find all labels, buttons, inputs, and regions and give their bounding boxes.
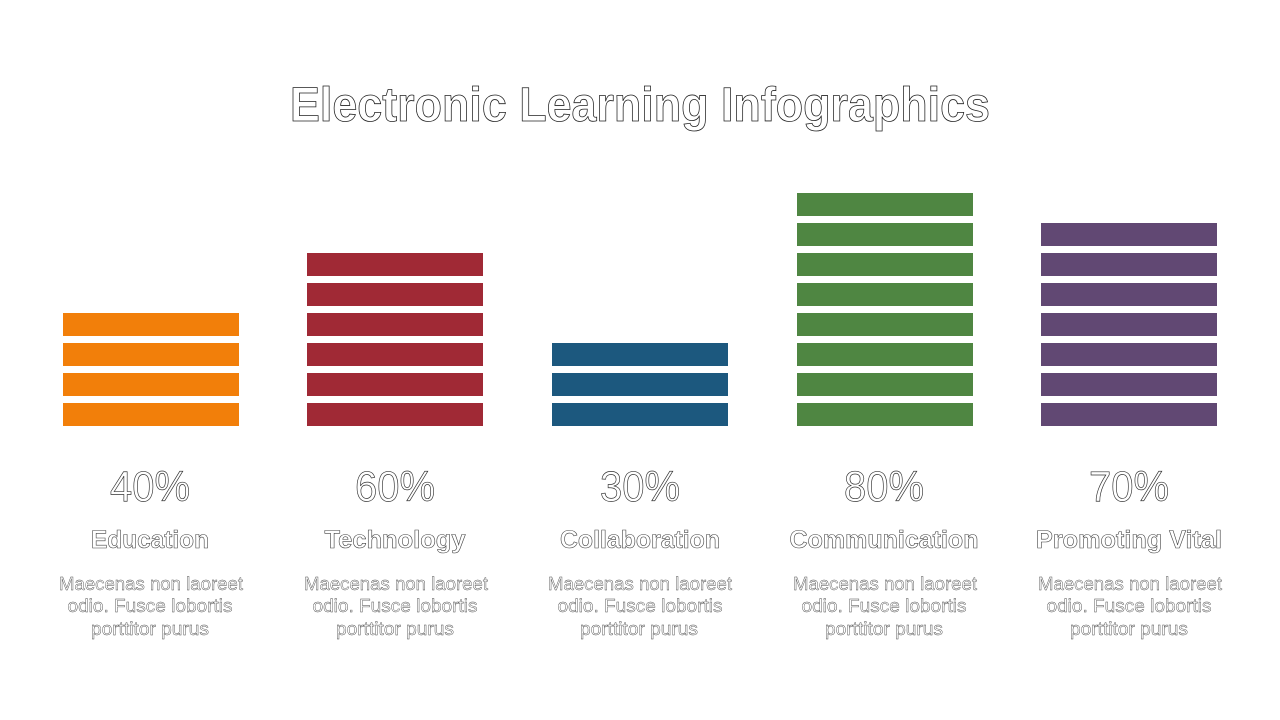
bar stack: communication 80%: [797, 193, 973, 426]
description: technology: odio. Fusce lobortis: [312, 596, 478, 616]
description: collaboration: Maecenas non laoreet: [548, 574, 732, 594]
description: technology: [304, 574, 488, 639]
description: education: Maecenas non laoreet: [59, 574, 243, 594]
description: collaboration: odio. Fusce lobortis: [558, 596, 722, 616]
description: communication: [793, 574, 977, 639]
label: Communication: Communication: [790, 526, 978, 554]
value: 70%: 70%: [1089, 463, 1169, 511]
bar stack: education 40%: [63, 313, 239, 426]
panel: communication: [790, 193, 978, 639]
label: Promoting Vital: Promoting Vital: [1036, 526, 1222, 554]
bar stack: collaboration 30%: [552, 343, 728, 426]
label: Technology: Technology: [324, 526, 466, 554]
bar stack: promoting vital 70%: [1041, 223, 1217, 426]
value: 80%: 80%: [844, 463, 924, 511]
description: education: porttitor purus: [91, 619, 209, 639]
value: 40%: 40%: [110, 463, 190, 511]
panel: promoting vital: [1036, 223, 1222, 639]
value: 30%: 30%: [600, 463, 680, 511]
panel: education: [59, 313, 243, 639]
label: Education: Education: [91, 526, 209, 554]
description: promoting vital: Maecenas non laoreet: [1038, 574, 1222, 594]
label: Collaboration: Collaboration: [560, 526, 720, 554]
description: education: odio. Fusce lobortis: [68, 596, 232, 616]
description: communication: odio. Fusce lobortis: [802, 596, 966, 616]
description: communication: porttitor purus: [825, 619, 943, 639]
panel: technology: [304, 253, 488, 639]
description: collaboration: porttitor purus: [580, 619, 698, 639]
description: communication: Maecenas non laoreet: [793, 574, 977, 594]
bar stack: technology 60%: [307, 253, 483, 426]
description: promoting vital: odio. Fusce lobortis: [1046, 596, 1212, 616]
description: promoting vital: [1038, 574, 1222, 639]
description: promoting vital: porttitor purus: [1070, 619, 1188, 639]
description: education: [59, 574, 243, 639]
description: technology: Maecenas non laoreet: [304, 574, 488, 594]
description: collaboration: [548, 574, 732, 639]
value: 60%: 60%: [355, 463, 435, 511]
panel: collaboration: [548, 343, 732, 639]
description: technology: porttitor purus: [336, 619, 454, 639]
title: Electronic Learning Infographics: [290, 79, 990, 132]
